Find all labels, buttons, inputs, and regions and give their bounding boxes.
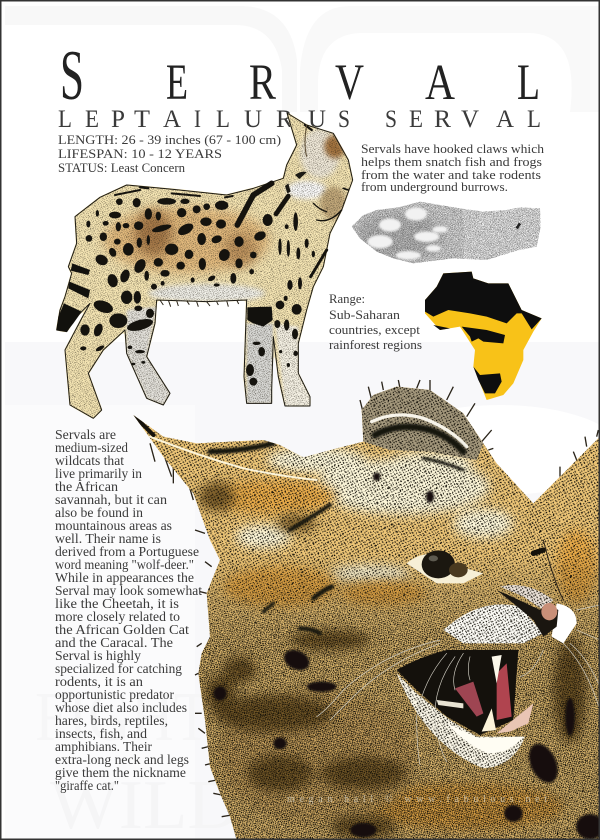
facts block: LENGTH: 26 - 39 inches (67 - 100 cm) [58, 132, 281, 147]
subtitle: Leptailurus serval: R [434, 106, 451, 133]
white nose side [552, 603, 577, 643]
text: serval description: rodents, it is an [55, 674, 143, 689]
text: hooked claws: Servals have hooked claws which [361, 141, 545, 156]
text: range: Sub-Saharan [329, 307, 401, 322]
text: serval description: the African Golden Cat [55, 622, 189, 637]
text: serval description: extra-long neck and legs [55, 752, 189, 767]
serval spots [80, 198, 315, 386]
head colour patches [198, 447, 597, 838]
ear markings [135, 415, 563, 633]
subtitle: Leptailurus serval: I [194, 106, 201, 133]
illustration: full-body serval [56, 112, 354, 419]
subtitle: Leptailurus serval: L [58, 106, 72, 133]
title: Serval: R [249, 55, 276, 111]
serval face [285, 125, 307, 193]
subtitle: Leptailurus serval: R [276, 106, 293, 133]
text: serval description: the African [55, 479, 118, 494]
subtitle: Leptailurus serval: E [409, 106, 423, 133]
subtitle: Leptailurus serval: P [111, 106, 125, 133]
text: hooked claws [361, 141, 545, 194]
watermark background: FIGHT [35, 679, 210, 756]
facts block: LIFESPAN: 10 - 12 YEARS [58, 146, 222, 161]
text: serval description: like the Cheetah, it is [55, 596, 179, 611]
subtitle: Leptailurus serval: S [385, 106, 397, 133]
subtitle: Leptailurus serval: A [163, 106, 181, 133]
text: serval description: derived from a Portuguese [55, 544, 199, 559]
text: serval description: mountainous areas as [55, 518, 172, 533]
open mouth [397, 650, 533, 735]
text: hooked claws: from the water and take rodents [361, 167, 541, 182]
title: Serval [60, 37, 540, 115]
head fur spikes [150, 380, 598, 817]
title: Serval: E [166, 55, 188, 111]
title: Serval: L [517, 55, 540, 111]
eye [407, 550, 483, 583]
text: serval description: insects, fish, and [55, 726, 147, 741]
subtitle: Leptailurus serval: E [85, 106, 99, 133]
serval outline [57, 113, 353, 418]
subtitle: Leptailurus serval: U [244, 106, 262, 133]
text: range: rainforest regions [329, 337, 422, 352]
dark face spots [213, 472, 600, 839]
paw pads [367, 207, 448, 260]
top ear [362, 387, 483, 460]
text: hooked claws: helps them snatch fish and frogs [361, 154, 542, 169]
subtitle: Leptailurus serval: V [461, 106, 479, 133]
facts block: STATUS: Least Concern [58, 161, 186, 175]
text: serval description [55, 427, 202, 793]
whiskers [317, 605, 600, 765]
illustration: serval paw [352, 202, 541, 264]
text: serval description: hares, birds, reptiles, [55, 713, 168, 728]
text: serval description: give them the nickname [55, 765, 186, 780]
text: hooked claws: from underground burrows. [361, 179, 508, 194]
serval neck and back stripes [115, 125, 348, 277]
text: serval description: wildcats that [55, 453, 124, 468]
text: serval description: live primarily in [55, 466, 142, 481]
text: serval description: word meaning "wolf-deer." [55, 557, 194, 572]
subtitle: Leptailurus serval: U [308, 106, 326, 133]
nose [497, 590, 558, 637]
range map of Africa [425, 272, 542, 400]
subtitle: Leptailurus serval: T [134, 106, 150, 133]
facts block [58, 132, 281, 175]
title: Serval: V [335, 55, 364, 111]
text: serval description: amphibians. Their [55, 739, 152, 754]
text: range [329, 291, 422, 352]
text: serval description: specialized for catching [55, 661, 182, 676]
text: serval description: savannah, but it can [55, 492, 167, 507]
title: Serval: S [60, 37, 84, 115]
text: range: Range: [329, 291, 365, 306]
subtitle: Leptailurus serval: L [216, 106, 230, 133]
text: serval description: Serval may look somewhat [55, 583, 202, 598]
text: range: countries, except [329, 322, 420, 337]
subtitle: Leptailurus serval: L [527, 106, 541, 133]
text: serval description: While in appearances the [55, 570, 194, 585]
title: Serval: A [425, 55, 455, 111]
denser stipple on lower fur [198, 556, 598, 838]
text: serval description: well. Their name is [55, 531, 161, 546]
subtitle: Leptailurus serval: S [338, 106, 350, 133]
stippled fur dots [123, 373, 600, 840]
chin and lower lip [397, 673, 525, 768]
white muzzle [443, 585, 553, 643]
serval tail bands and leg sock [57, 263, 273, 332]
text: serval description: and the Caracal. The [55, 635, 173, 650]
text: serval description: also be found in [55, 505, 143, 520]
text: serval description: whose diet also includes [55, 700, 187, 715]
pure white lip band [447, 723, 523, 753]
text: serval description: more closely related to [55, 609, 180, 624]
illustration: serval head portrait [123, 373, 600, 840]
artist credit: megan hall © www.fabulous.net [287, 794, 547, 805]
text: serval description: opportunistic predator [55, 687, 174, 702]
subtitle: Leptailurus serval: A [496, 106, 514, 133]
text: serval description: medium-sized [55, 440, 128, 455]
text: serval description: Serval is highly [55, 648, 141, 663]
serval belly fur fringe [160, 300, 239, 307]
subtitle: Leptailurus serval [58, 106, 541, 133]
text: serval description: "giraffe cat." [55, 778, 119, 793]
text: serval description: Servals are [55, 427, 116, 442]
